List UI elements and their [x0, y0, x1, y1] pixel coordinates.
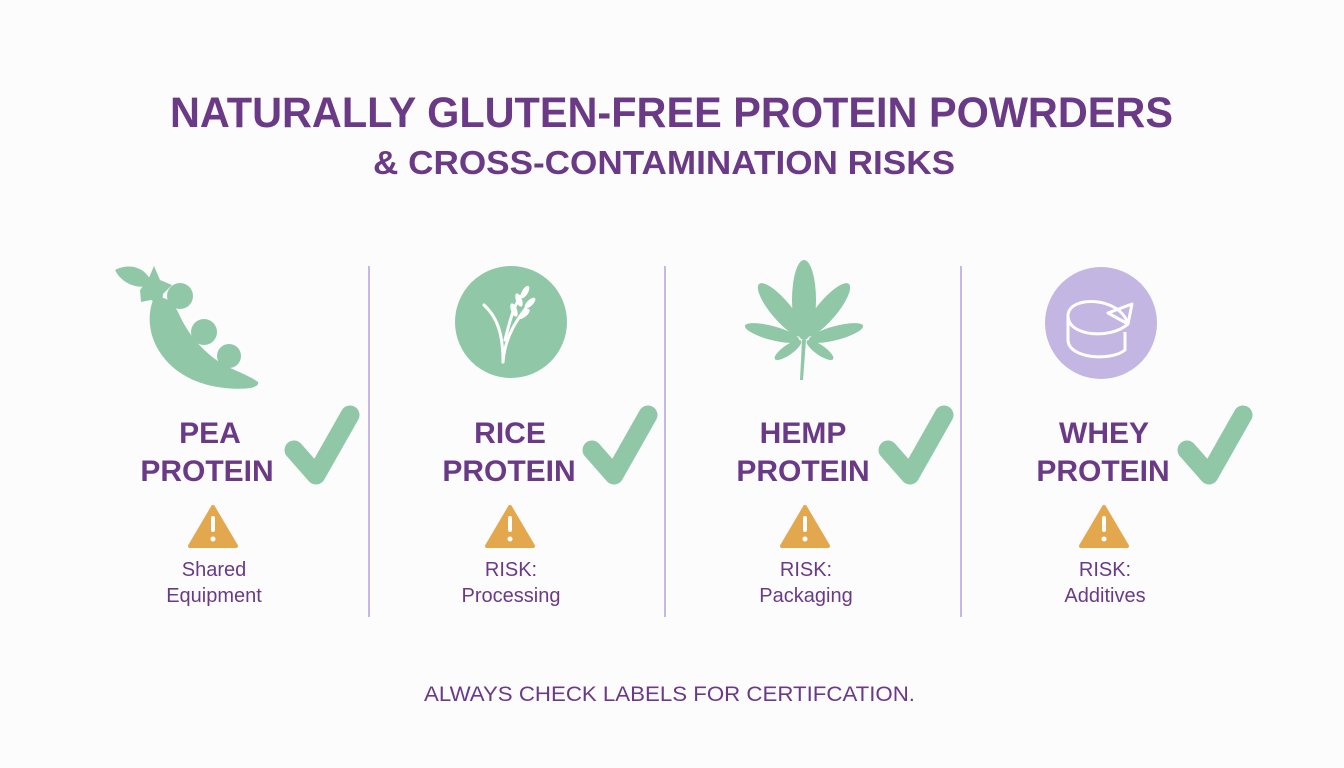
icon: check	[888, 415, 944, 475]
icon: warning	[190, 507, 236, 546]
title: NATURALLY GLUTEN-FREE PROTEIN POWRDERS	[170, 89, 1173, 137]
icon: check	[294, 415, 350, 475]
icon: check	[592, 415, 648, 475]
panel: whey protein	[1036, 267, 1243, 607]
icon: warning	[487, 507, 533, 546]
icon: pea pod	[115, 266, 258, 389]
panel: pea protein: PROTEIN	[140, 455, 274, 488]
panel: rice protein: PROTEIN	[442, 455, 576, 488]
text: risk: RISK:	[485, 559, 537, 581]
text: risk: Shared	[182, 559, 246, 581]
text: risk: Processing	[462, 585, 560, 607]
icon: whey	[1045, 267, 1157, 379]
icon: warning	[782, 507, 828, 546]
heading: hemp protein: HEMP	[760, 417, 846, 450]
icon: hemp leaf	[743, 260, 865, 380]
panel: hemp protein	[736, 260, 944, 607]
text: risk: RISK:	[1079, 559, 1131, 581]
title	[170, 89, 1173, 181]
heading: rice protein: RICE	[474, 417, 546, 450]
text: risk	[462, 559, 560, 607]
text: risk: Equipment	[166, 585, 262, 607]
title: & CROSS-CONTAMINATION RISKS	[373, 144, 955, 181]
footer note: ALWAYS CHECK LABELS FOR CERTIFCATION.	[424, 683, 915, 706]
text: risk	[759, 559, 853, 607]
icon: warning	[1081, 507, 1127, 546]
heading: whey protein: WHEY	[1059, 417, 1149, 450]
panel: pea protein	[115, 266, 350, 607]
heading: pea protein: PEA	[179, 417, 241, 450]
panel: hemp protein: PROTEIN	[736, 455, 870, 488]
text: risk: Packaging	[759, 585, 853, 607]
text: risk: Additives	[1064, 585, 1146, 607]
panel: rice protein	[442, 266, 648, 607]
text: risk: RISK:	[780, 559, 832, 581]
icon: rice	[455, 266, 567, 378]
text: risk	[166, 559, 262, 607]
panel: whey protein: PROTEIN	[1036, 455, 1170, 488]
icon: check	[1187, 415, 1243, 475]
text: risk	[1064, 559, 1146, 607]
